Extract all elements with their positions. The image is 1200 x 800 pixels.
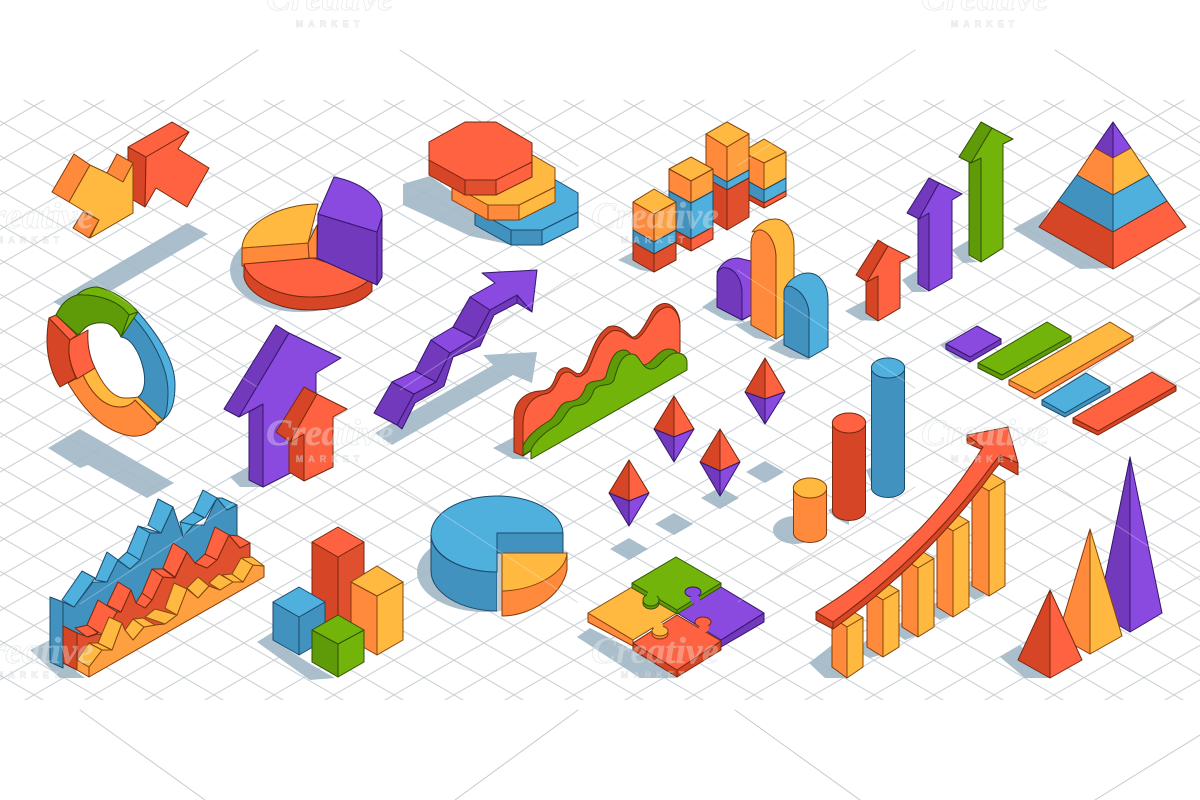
- arrow: purple zig-zag trend: [374, 270, 537, 429]
- chart: donut ring: [47, 287, 175, 436]
- bar 4: [937, 512, 969, 617]
- cube: green: [312, 615, 364, 677]
- watermark: top centre: [266, 0, 394, 29]
- diamond 3: [700, 429, 740, 496]
- watermark: upper centre: MARKET: [621, 235, 689, 245]
- cone: yellow: [1058, 529, 1122, 654]
- watermark: middle: MARKET: [296, 454, 364, 464]
- octagon: blue: [475, 172, 578, 245]
- bar: tallest: [706, 122, 749, 230]
- watermark: top right: MARKET: [951, 19, 1019, 29]
- arrow: red curved: [816, 427, 1018, 629]
- bar: red: [1073, 372, 1176, 435]
- watermark: lower centre: MARKET: [621, 670, 689, 680]
- cube: blue: [273, 587, 325, 655]
- watermark: middle right: MARKET: [951, 454, 1019, 464]
- diamond 2: [654, 396, 694, 462]
- cylinder: orange: [793, 478, 827, 542]
- chart: rounded columns: [717, 219, 828, 358]
- arrow: green: [959, 122, 1013, 262]
- cone: red: [1018, 590, 1082, 678]
- bar: front: [633, 189, 676, 272]
- bar 5: [972, 472, 1005, 596]
- chart: striped column bars: [633, 122, 786, 272]
- cube: yellow: [351, 566, 403, 655]
- watermark: middle right: Creative: [921, 413, 1049, 454]
- bar: second: [669, 157, 713, 251]
- layer: yellow: [77, 557, 264, 677]
- chart: blue pie with orange slice: [431, 496, 567, 616]
- puzzle piece: red: [633, 615, 721, 677]
- shadows: [30, 176, 1113, 680]
- puzzle piece: yellow: [588, 587, 677, 646]
- bar: green: [978, 322, 1071, 380]
- octagon: yellow: [452, 147, 555, 220]
- bar 2: [867, 581, 899, 657]
- bar 1: [832, 608, 863, 678]
- cylinder: blue: [871, 358, 905, 497]
- chart: cones: [1018, 457, 1162, 678]
- watermark: lower centre: Creative: [591, 631, 719, 672]
- chart: jigsaw puzzle: [588, 557, 764, 677]
- watermark: top right: [921, 0, 1049, 29]
- bar: yellow: [1009, 322, 1133, 399]
- icon: diamond markers: [609, 358, 785, 526]
- chart: wave area: [514, 304, 687, 459]
- chart: stacked octagons: [429, 122, 578, 245]
- cone: purple: [1098, 457, 1162, 632]
- watermark: top centre: MARKET: [296, 19, 364, 29]
- octagon: red: [429, 122, 532, 195]
- bar: far right: [742, 139, 786, 208]
- puzzle piece: green: [632, 557, 721, 614]
- chart: cylinders: [793, 358, 905, 542]
- bar: purple: [946, 326, 1001, 362]
- arrow: purple: [907, 178, 962, 291]
- layer: red: [63, 527, 250, 672]
- cube: red: [312, 527, 364, 640]
- chart: pie with raised purple slice: [242, 177, 382, 310]
- watermark: middle: Creative: [266, 413, 394, 454]
- layer: blue: [50, 490, 237, 668]
- diamond 4: [609, 460, 649, 526]
- diamond 1: [745, 358, 785, 424]
- puzzle piece: purple: [677, 587, 764, 647]
- bar 3: [902, 549, 934, 637]
- chart: layered jagged area: [50, 490, 264, 677]
- icon: double arrows, top left: [52, 122, 209, 238]
- chart: rising bars with red arrow: [816, 427, 1018, 678]
- chart: cube cluster: [273, 527, 403, 677]
- arrow: red: [856, 240, 910, 321]
- icon: big purple arrow with red arrow: [224, 325, 347, 487]
- chart: layered pyramid: [1039, 122, 1186, 269]
- bar: blue: [1042, 373, 1110, 417]
- icon: three rising up arrows: [856, 122, 1013, 321]
- cylinder: red: [832, 413, 866, 520]
- watermark: upper centre: Creative: [591, 196, 719, 237]
- chart: flat horizontal bars: [946, 322, 1176, 435]
